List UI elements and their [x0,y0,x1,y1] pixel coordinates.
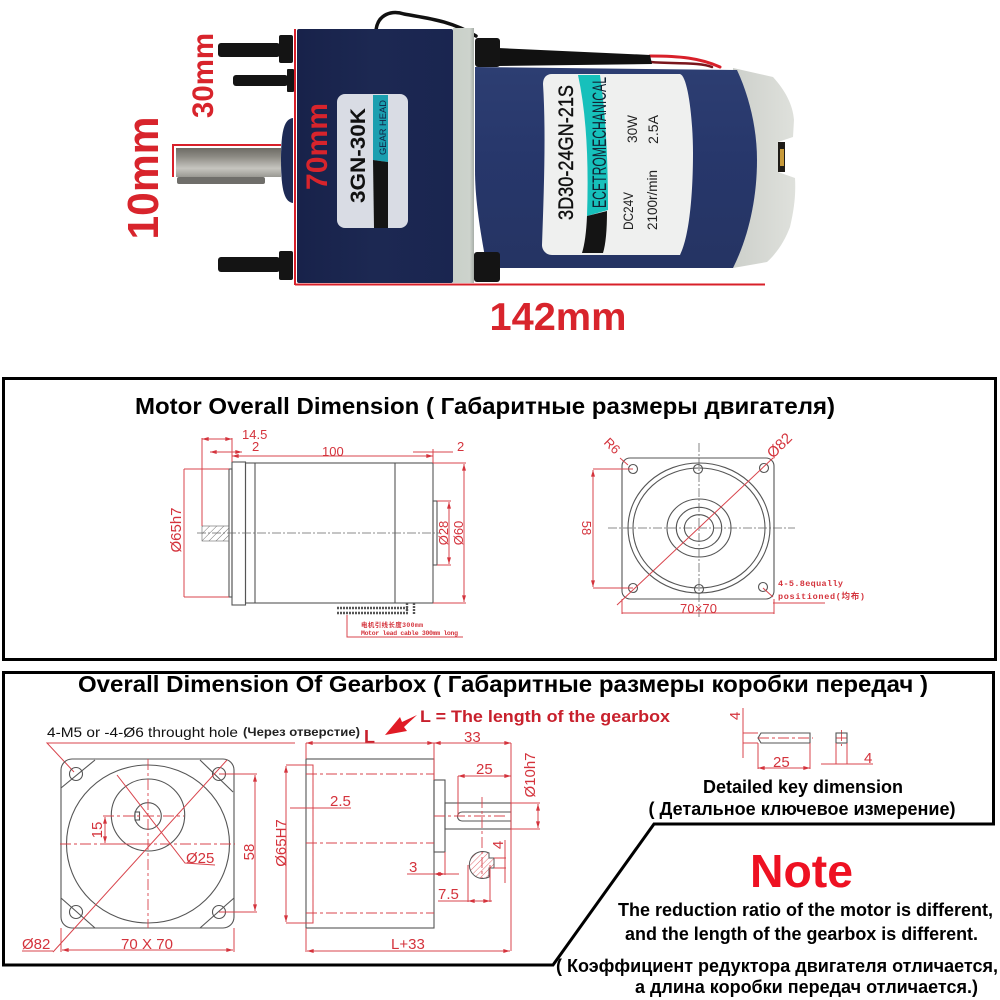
gearbox flange [453,28,474,283]
drawing: gearbox side view: Ø65H7 [273,819,290,867]
wires [376,13,720,67]
panel frame [4,672,994,965]
dimension lines [593,458,825,614]
motor label: 3D30-24GN-21S [555,85,578,220]
drawing: motor front view: R6 [601,435,623,457]
note text russian [556,956,998,997]
gearhead label: 3GN-30K [347,108,370,203]
panel: motor overall dimension [4,378,996,660]
dimension labels: Ø82 [764,430,796,462]
heading: Motor Overall Dimension ( Габаритные размеры двигателя) [135,393,835,419]
dimension lines [22,760,257,952]
drawing: gearbox side view: 2.5 [330,793,351,810]
drawing: gearbox side view: 3 [409,859,417,876]
motor label: 2.5A [645,114,661,144]
label: 70mm: 70mm [301,103,334,190]
hole note [47,724,360,772]
key caption: ( Детальное ключевое измерение) [648,799,956,819]
motor terminal [778,142,785,172]
shaft cross-section [469,852,494,878]
note title: Note [750,845,853,897]
drawing: motor side view: 2 [252,439,259,454]
dimension lines [184,438,466,603]
lead cables [337,603,414,614]
drawing: gearbox side view: 25 [476,761,493,778]
red dimension lines [173,29,765,285]
drawing: motor side view [168,427,466,637]
drawing: motor side view: Ø60 [451,521,466,545]
label: 10mm: 10mm [119,116,168,240]
motor label: 30W [624,114,640,143]
note text english [618,900,993,944]
drawing: motor side view: Motor lead cable 300mm long [361,630,458,637]
drawing: motor side view: 电机引线长度300mm [361,620,423,629]
panel: gearbox overall dimension [4,671,994,965]
drawing: motor side view: 2 [457,439,464,454]
motor label [542,74,693,255]
note text russian: ( Коэффициент редуктора двигателя отличается, [556,956,998,976]
motor label: ECETROMECHANICAL [590,77,611,208]
drawing: motor front view: 58 [579,521,594,535]
motor label: DC24V [620,191,636,230]
gearbox body [297,29,453,283]
gearhead label: GEAR HEAD [378,99,388,155]
motor body [475,67,757,268]
drawing: gearbox front view [22,759,258,953]
gearhead label [337,94,408,228]
hole note: 4-M5 or -4-Ø6 throught hole [47,724,238,740]
callout: note [556,845,998,997]
drawing: motor side view: Ø28 [436,521,451,545]
motor end cap [733,68,795,268]
drawing: gearbox front view: 15 [89,822,106,838]
drawing: gearbox side view: 7.5 [438,886,459,903]
drawing: motor front view: 4-5.8equally [778,579,843,589]
drawing: gearbox front view: 58 [241,844,258,860]
note text russian: а длина коробки передач отличается.) [635,977,978,997]
dimension labels: 14.5 [242,427,267,442]
L callout with arrow: L [364,727,375,747]
dimension labels: Ø82 [22,936,50,953]
motor label: 2100r/min [644,170,660,230]
drawing: motor side view: 100 [322,444,344,459]
screws [218,35,500,282]
label: 142mm: 142mm [490,296,626,339]
note text english: and the length of the gearbox is different. [625,924,978,944]
label: 30mm: 30mm [187,33,220,118]
panel frame [4,378,996,660]
drawing: key detail: 4 [864,750,872,767]
output shaft [176,118,293,203]
hole note: (Через отверстие) [243,725,360,739]
drawing: motor front view [579,430,865,619]
note text english: The reduction ratio of the motor is different, [618,900,993,920]
dimension lines [286,743,540,952]
drawing: key detail: 25 [773,754,790,771]
key caption [648,777,956,819]
drawing: gearbox side view: 4 [490,841,507,849]
heading: Overall Dimension Of Gearbox ( Габаритные размеры коробки передач ) [78,671,928,697]
drawing: motor side view: Ø65h7 [168,507,185,553]
drawing: motor front view: 70×70 [680,601,717,616]
drawing: gearbox front view: Ø25 [186,850,214,867]
motor photo with red dimensions [119,13,795,339]
drawing: gearbox side view: L+33 [391,936,425,953]
drawing: key detail: 4 [727,712,744,720]
drawing: gearbox front view: 70 X 70 [121,936,173,953]
drawing: gearbox side view [273,729,540,953]
drawing: key detail [727,708,873,771]
L callout with arrow: L = The length of the gearbox [420,707,671,726]
key caption: Detailed key dimension [703,777,903,797]
drawing: gearbox side view: Ø10h7 [522,752,539,798]
L callout with arrow [364,707,671,747]
dimension labels: 33 [464,729,481,746]
drawing: motor front view: positioned(均布) [778,591,865,602]
